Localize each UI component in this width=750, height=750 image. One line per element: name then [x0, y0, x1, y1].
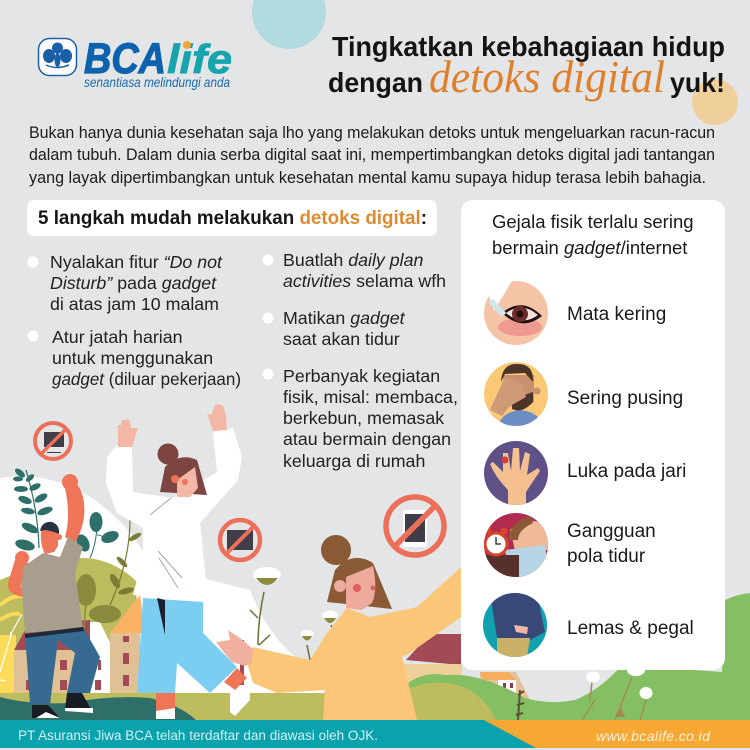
step: daily plan: activities selama wfh [283, 271, 446, 291]
step: physical activities [262, 366, 458, 471]
scenery: olive foreground hill [400, 682, 496, 720]
logo: BCA life [38, 35, 232, 90]
plant: olive leaves and vine [76, 520, 142, 630]
flowers: right side daisies [516, 664, 652, 720]
footer bar: website [484, 720, 750, 748]
step: physical activities: keluarga di rumah [283, 451, 425, 471]
label: Sering pusing [567, 388, 683, 409]
icon: no monitor sign [35, 423, 71, 459]
step: physical activities: berkebun, memasak [283, 408, 444, 428]
icon: no phone sign [386, 497, 444, 555]
icon: no tablet sign [220, 520, 260, 560]
footer bar: regulator statement: PT Asuransi Jiwa BCA telah terdaftar dan diawasi oleh OJK. [18, 728, 378, 743]
intro paragraph: Bukan hanya dunia kesehatan saja lho yang melakukan detoks untuk mengeluarkan racun-racun [29, 124, 715, 142]
icon: insomnia in bed [484, 513, 550, 577]
panel heading [492, 211, 694, 258]
title: yuk! [670, 67, 725, 98]
step: daily quota: Atur jatah harian [52, 327, 182, 347]
step: do not disturb: Disturb” pada gadget [50, 273, 217, 293]
step: daily quota: untuk menggunakan [52, 348, 213, 368]
intro paragraph [29, 124, 715, 187]
panel: five steps heading [27, 200, 437, 236]
step: physical activities: atau bermain dengan [283, 429, 451, 449]
icon: injured hand [484, 441, 548, 505]
logo tagline: senantiasa melindungi anda [84, 75, 230, 90]
step: daily quota: gadget (diluar pekerjaan) [52, 369, 241, 389]
icon: dry eye [484, 281, 548, 345]
plant: tall leafy stem [13, 467, 120, 558]
intro paragraph: yang layak dipertimbangkan untuk kesehatan mental kamu supaya hidup terasa lebih bahagia. [29, 169, 706, 187]
person: man in grey shirt [8, 474, 100, 718]
label: Mata kering [567, 304, 666, 325]
panel: physical symptoms [461, 200, 725, 670]
person: woman in yellow sweater [216, 535, 461, 720]
person: woman in white sweater and blue trousers [106, 404, 250, 719]
label: Gangguan [567, 521, 656, 542]
label: Lemas & pegal [567, 618, 694, 639]
step: daily plan: Buatlah daily plan [283, 250, 423, 270]
title: detoks digital [429, 51, 665, 102]
footer bar: regulator statement [0, 720, 750, 748]
flowers: white daisies [250, 567, 338, 660]
logo wordmark life: life [167, 36, 232, 82]
icon: tired body [483, 593, 547, 657]
step: do not disturb [28, 252, 223, 314]
panel heading: Gejala fisik terlalu sering [492, 211, 694, 232]
step: physical activities: Perbanyak kegiatan [283, 366, 440, 386]
step: gadget off at bedtime [262, 308, 406, 349]
logo wordmark: BCA [84, 35, 166, 83]
label: Luka pada jari [567, 461, 686, 482]
step: physical activities: fisik, misal: membaca, [283, 387, 458, 407]
step: gadget off at bedtime: saat akan tidur [283, 329, 400, 349]
scenery: right green hill [400, 593, 750, 720]
label: pola tidur [567, 546, 646, 567]
label [567, 521, 656, 567]
scenery background [0, 476, 530, 721]
intro paragraph: dalam tubuh. Dalam dunia serba digital saat ini, mempertimbangkan detoks digital jadi tantangan [29, 146, 715, 164]
step: daily quota [28, 327, 241, 389]
title: Tingkatkan kebahagiaan hidup [332, 31, 725, 62]
panel heading: bermain gadget/internet [492, 237, 687, 258]
title [328, 31, 725, 102]
footer bar: website: www.bcalife.co.id [596, 728, 711, 744]
icon: BCA shield [38, 38, 76, 76]
step: daily plan [262, 250, 446, 291]
panel: steps list [28, 250, 458, 471]
step: gadget off at bedtime: Matikan gadget [283, 308, 406, 328]
step: do not disturb: di atas jam 10 malam [50, 294, 219, 314]
panel: five steps heading: 5 langkah mudah melakukan detoks digital: [38, 208, 427, 229]
icon: headache man [484, 362, 548, 426]
step: do not disturb: Nyalakan fitur “Do not [50, 252, 223, 272]
title: dengan [328, 67, 423, 98]
